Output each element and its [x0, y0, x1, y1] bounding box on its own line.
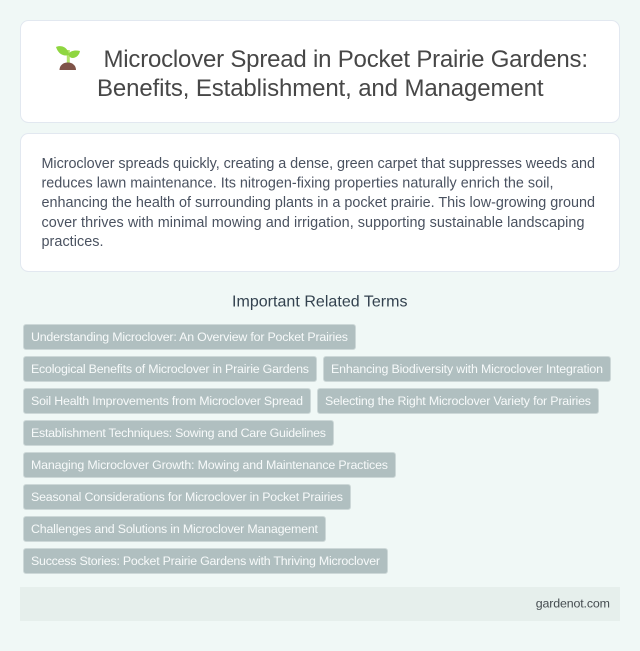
footer bar: [20, 587, 620, 621]
tag: managing growth: Managing Microclover Growth: Mowing and Maintenance Practices: [31, 458, 388, 472]
tag: enhancing biodiversity: [324, 356, 610, 382]
title: Microclover Spread in Pocket Prairie Gardens:: [104, 46, 588, 73]
tag: success stories: [24, 548, 388, 574]
description text: cover thrives with minimal mowing and irrigation, supporting sustainable landscaping: [42, 215, 584, 231]
tag: success stories: Success Stories: Pocket Prairie Gardens with Thriving Microclover: [31, 554, 380, 568]
tag: seasonal considerations: Seasonal Considerations for Microclover in Pocket Prairies: [31, 490, 343, 504]
tag list: [24, 324, 610, 574]
tag: ecological benefits: Ecological Benefits of Microclover in Prairie Gardens: [31, 362, 309, 376]
description text: reduces lawn maintenance. Its nitrogen-fixing properties naturally enrich the soil,: [42, 176, 554, 192]
tag: enhancing biodiversity: Enhancing Biodiversity with Microclover Integration: [331, 362, 603, 376]
tag: challenges and solutions: [24, 516, 326, 542]
description text: [42, 156, 595, 250]
tag: challenges and solutions: Challenges and Solutions in Microclover Management: [31, 522, 319, 536]
tag: establishment techniques: [24, 420, 334, 446]
panel: title card: [20, 20, 620, 122]
tag: selecting variety: Selecting the Right Microclover Variety for Prairies: [325, 394, 591, 408]
panel: description card: [20, 134, 620, 272]
tag: managing growth: [24, 452, 396, 478]
tag: soil health: [24, 388, 310, 414]
tag: understanding microclover: [24, 324, 356, 350]
title: [97, 46, 588, 102]
tag: understanding microclover: Understanding Microclover: An Overview for Pocket Prairies: [31, 330, 348, 344]
heading: important related terms: Important Related Terms: [232, 294, 408, 310]
tag: ecological benefits: [24, 356, 316, 382]
tag: seasonal considerations: [24, 484, 350, 510]
tag: soil health: Soil Health Improvements from Microclover Spread: [31, 394, 303, 408]
title: Benefits, Establishment, and Management: [97, 75, 544, 102]
tag: selecting variety: [318, 388, 598, 414]
footer credit: gardenot.com: [536, 596, 610, 610]
description text: Microclover spreads quickly, creating a dense, green carpet that suppresses weeds and: [42, 156, 595, 172]
tag: establishment techniques: Establishment Techniques: Sowing and Care Guidelines: [31, 426, 326, 440]
description text: practices.: [42, 234, 104, 250]
icon: seedling: [56, 46, 80, 70]
description text: enhancing the health of surrounding plants in a pocket prairie. This low-growing ground: [42, 195, 595, 211]
